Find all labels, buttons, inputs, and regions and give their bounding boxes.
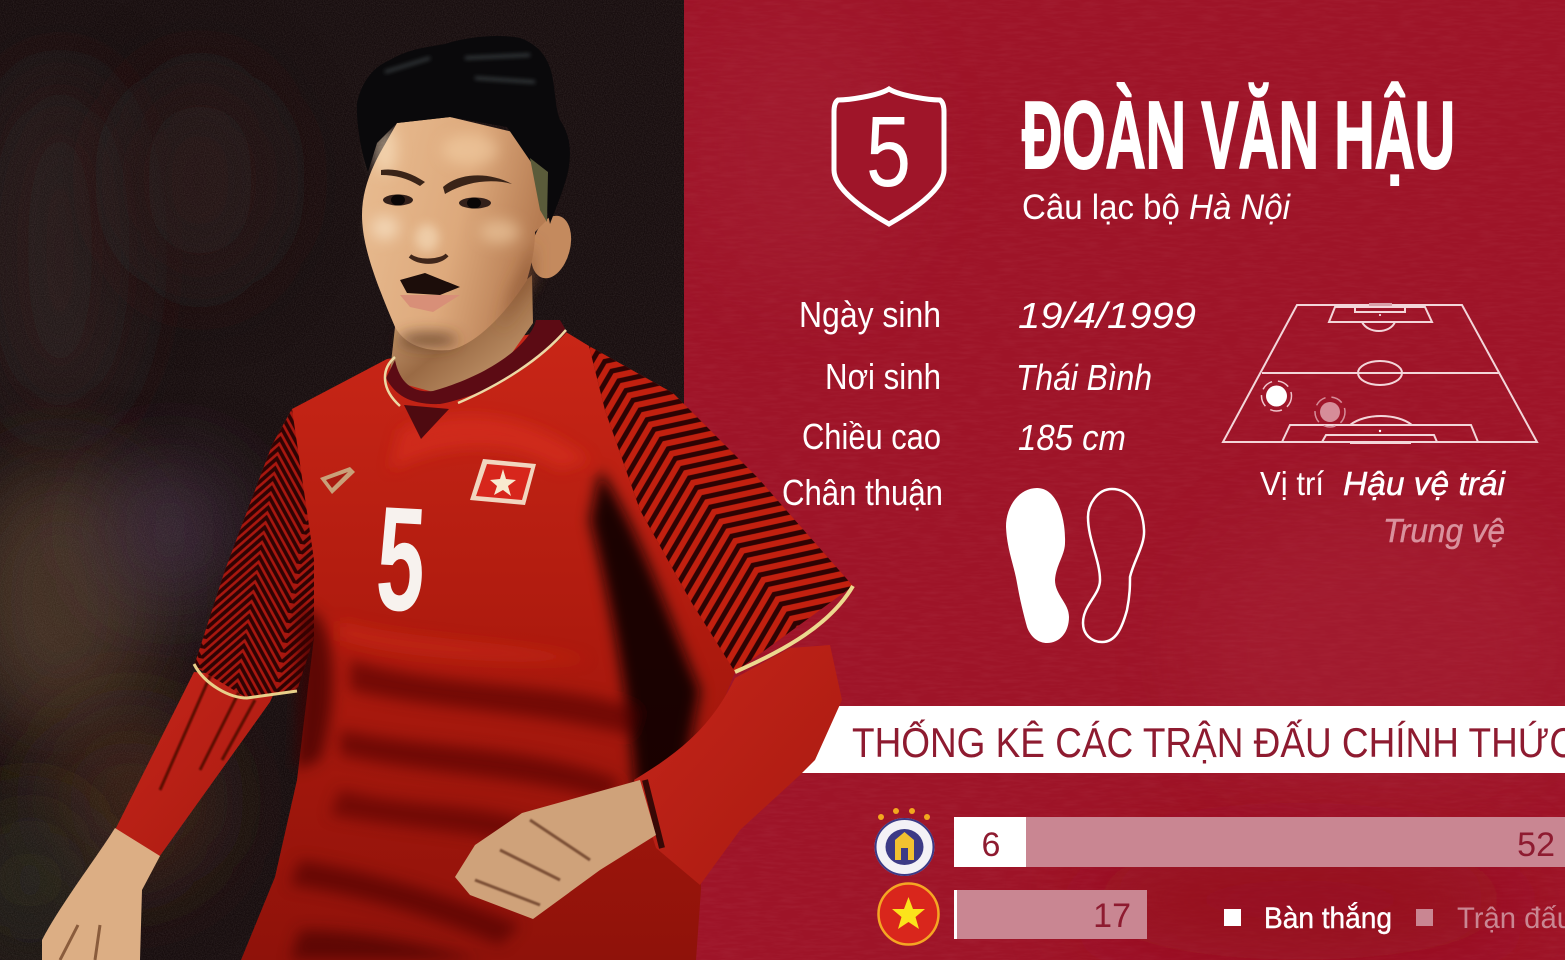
right sleeve chevron stripes — [589, 346, 853, 670]
left forearm — [115, 672, 280, 860]
value: Hanoi goals: 6 — [982, 826, 1000, 864]
bio labels: Chiều cao — [802, 416, 941, 457]
legend — [1224, 902, 1565, 935]
bio labels: Ngày sinh — [799, 294, 941, 335]
ear — [524, 211, 578, 283]
bar: national team matches — [954, 890, 1147, 939]
player figure — [42, 36, 880, 960]
position label — [1260, 465, 1507, 549]
right hand — [455, 780, 656, 919]
bio values — [1016, 295, 1196, 458]
club line: Câu lạc bộ Hà Nội — [1022, 188, 1291, 227]
icon: other foot, outlined — [1083, 489, 1144, 642]
hair — [357, 36, 570, 224]
right forearm — [634, 645, 842, 885]
eyes — [383, 194, 491, 208]
icon: Hanoi FC crest — [874, 808, 934, 876]
left sleeve base — [194, 409, 314, 698]
dark blurred stadium photo background — [0, 0, 684, 960]
bio labels: Chân thuận — [782, 472, 943, 513]
bar: Hanoi goals — [954, 817, 1026, 867]
torso — [241, 329, 735, 960]
shield number badge — [834, 89, 944, 224]
eyebrows — [381, 170, 512, 194]
neck — [390, 275, 533, 392]
face highlights — [371, 126, 535, 348]
shaved side fade — [530, 158, 548, 222]
collar — [386, 320, 567, 404]
red info panel background — [684, 0, 1565, 960]
right sleeve base — [589, 346, 853, 672]
hair sheen — [385, 55, 535, 82]
mouth — [400, 273, 460, 312]
value: national team matches: 17 — [1093, 897, 1131, 935]
icon: Vietnam flag roundel — [878, 884, 938, 944]
bar: national team goals — [954, 890, 957, 939]
left sleeve stripes — [195, 409, 314, 696]
shield number badge: 5 — [866, 96, 911, 208]
bio labels: Nơi sinh — [825, 356, 941, 397]
position marker: centre back — [1315, 397, 1345, 427]
jersey sleeve trim — [194, 664, 297, 698]
collar notch — [404, 405, 449, 439]
value: Hanoi matches: 52 — [1517, 826, 1555, 864]
position label: Hậu vệ trái — [1343, 465, 1507, 502]
bio values: Thái Bình — [1016, 357, 1152, 398]
jersey badge logo — [320, 467, 355, 494]
bio values: 185 cm — [1018, 417, 1126, 458]
face — [362, 117, 547, 350]
legend: Bàn thắng — [1264, 902, 1392, 935]
position label: Vị trí — [1260, 465, 1324, 502]
jersey shadows and folds — [290, 416, 700, 960]
jersey number: 5 — [373, 476, 429, 643]
left hand — [42, 828, 160, 960]
jersey flag — [470, 459, 536, 505]
football pitch diagram — [1223, 303, 1537, 444]
nose — [410, 224, 447, 262]
bar: Hanoi matches — [1026, 817, 1565, 867]
bio labels — [782, 294, 943, 513]
position marker: left back — [1262, 381, 1292, 411]
icon: preferred foot, left filled — [1006, 488, 1069, 643]
position label: Trung vệ — [1383, 512, 1505, 549]
bio values: 19/4/1999 — [1018, 295, 1196, 336]
white stats heading band — [795, 706, 1565, 773]
